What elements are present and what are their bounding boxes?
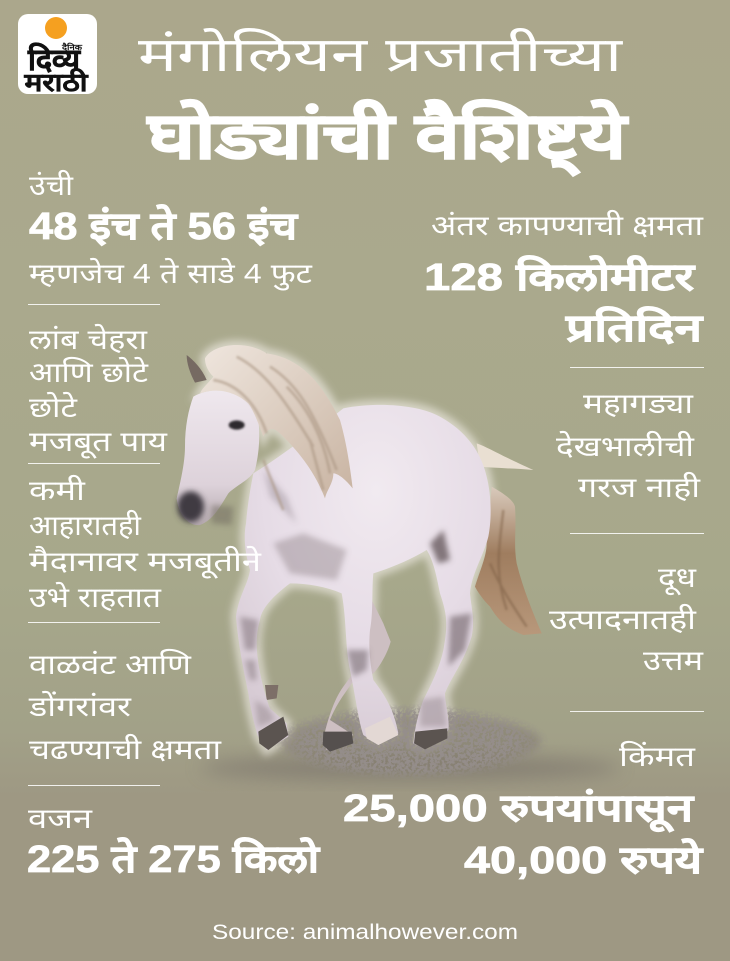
body and legs xyxy=(236,405,491,750)
eye xyxy=(229,420,245,430)
low diet: मैदानावर मजबूतीने xyxy=(29,545,262,579)
weight xyxy=(27,803,320,881)
ears xyxy=(187,355,207,383)
muzzle xyxy=(177,491,204,522)
weight: 225 ते 275 किलो xyxy=(27,837,320,881)
head xyxy=(177,390,259,525)
tail xyxy=(475,487,542,635)
long face and short legs xyxy=(29,323,168,459)
low maintenance: देखभालीची xyxy=(556,430,695,462)
logo: Divya Marathi xyxy=(18,14,97,97)
left column xyxy=(27,169,320,881)
long face and short legs: आणि छोटे xyxy=(29,356,149,388)
low diet: उभे राहतात xyxy=(29,581,162,613)
height: म्हणजेच 4 ते साडे 4 फुट xyxy=(29,257,313,291)
title: घोड्यांची वैशिष्ट्ये xyxy=(147,99,630,177)
mane strands xyxy=(213,357,337,510)
dirt ground base xyxy=(280,715,540,768)
title: मंगोलियन प्रजातीच्या xyxy=(138,27,624,82)
tail wisps xyxy=(477,443,533,470)
distance capacity: प्रतिदिन xyxy=(565,306,704,350)
far legs xyxy=(323,597,391,750)
source: Source: animalhowever.com xyxy=(212,921,518,944)
horse glow halo xyxy=(200,345,491,750)
milk production: उत्पादनातही xyxy=(549,603,697,635)
long face and short legs: मजबूत पाय xyxy=(29,426,168,459)
milk production: उत्तम xyxy=(643,645,704,676)
price: 40,000 रुपये xyxy=(464,838,704,882)
dirt ground specks xyxy=(270,703,550,780)
distance capacity: 128 किलोमीटर xyxy=(424,255,696,299)
height: 48 इंच ते 56 इंच xyxy=(29,204,299,248)
leg and chest shading xyxy=(240,470,472,727)
low diet: कमी xyxy=(29,474,86,506)
height xyxy=(29,169,313,291)
long face and short legs: छोटे xyxy=(29,391,78,423)
mane xyxy=(200,345,353,498)
low maintenance xyxy=(556,388,701,503)
logo: Divya Marathi: दैनिक xyxy=(61,42,83,52)
horse photo illustration xyxy=(177,345,550,780)
weight: वजन xyxy=(28,803,93,834)
far hind hoof xyxy=(323,732,353,752)
desert and mountain climbing: चढण्याची क्षमता xyxy=(29,733,222,765)
price: किंमत xyxy=(619,740,696,772)
hooves xyxy=(258,717,288,750)
long face and short legs: लांब चेहरा xyxy=(29,323,148,355)
logo: Divya Marathi: मराठी xyxy=(23,68,89,97)
desert and mountain climbing: वाळवंट आणि xyxy=(29,648,192,680)
milk production xyxy=(549,562,704,676)
right column xyxy=(343,209,704,882)
distance capacity xyxy=(424,209,704,350)
low maintenance: गरज नाही xyxy=(578,471,701,503)
low maintenance: महागड्या xyxy=(583,388,694,419)
low diet xyxy=(29,474,262,613)
height: उंची xyxy=(29,169,74,201)
price xyxy=(343,740,704,882)
far front hoof xyxy=(265,685,278,700)
logo: Divya Marathi: दिव्य xyxy=(27,42,81,77)
desert and mountain climbing xyxy=(28,648,222,765)
low diet: आहारातही xyxy=(29,509,142,541)
milk production: दूध xyxy=(658,562,697,596)
muzzle shadow xyxy=(212,505,233,525)
tail strands xyxy=(490,510,527,627)
distance capacity: अंतर कापण्याची क्षमता xyxy=(431,209,704,241)
ground shadow band xyxy=(200,755,620,781)
title xyxy=(138,27,630,177)
desert and mountain climbing: डोंगरांवर xyxy=(28,690,132,722)
price: 25,000 रुपयांपासून xyxy=(343,788,695,833)
icon: sun xyxy=(45,17,67,39)
